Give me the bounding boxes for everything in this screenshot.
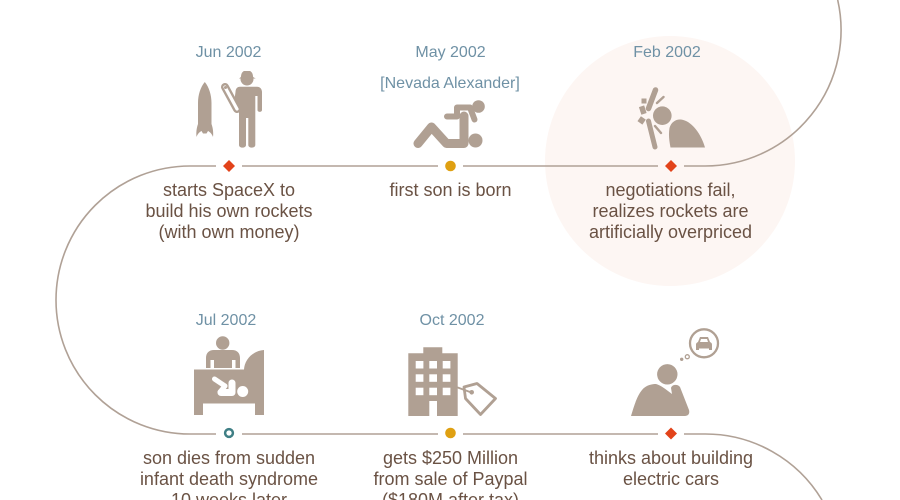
milestone: May 2002: first son is born	[389, 180, 512, 200]
icon: parent at crib	[194, 336, 264, 415]
icon: head hitting wall	[637, 90, 705, 148]
icon: thinker with car thought bubble	[631, 329, 718, 416]
diamond marker	[223, 160, 235, 172]
milestone: Jul 2002	[140, 312, 318, 500]
milestone: Feb 2002: negotiations fail,	[605, 180, 736, 200]
milestone: Oct 2002: gets $250 Million	[383, 448, 518, 468]
milestone: May 2002: May 2002	[415, 44, 486, 61]
circle marker	[445, 161, 456, 171]
diamond marker	[665, 428, 677, 440]
milestone: Jul 2002: son dies from sudden	[143, 448, 315, 468]
highlight circle	[545, 36, 795, 286]
circle marker	[445, 428, 456, 438]
milestone: Jun 2002: starts SpaceX to	[163, 180, 295, 200]
milestone: Jun 2002: Jun 2002	[196, 44, 262, 61]
diamond marker	[665, 160, 677, 172]
milestone: May 2002: [Nevada Alexander]	[380, 75, 520, 92]
milestone: Jul 2002: infant death syndrome	[140, 469, 318, 489]
ring marker	[225, 429, 233, 437]
milestone: electric cars	[589, 329, 753, 489]
milestone: Oct 2002: Oct 2002	[420, 312, 485, 329]
milestone: Oct 2002	[373, 312, 528, 500]
icon: couple	[418, 100, 485, 148]
milestone: electric cars: electric cars	[623, 469, 719, 489]
icon: building with price tag	[408, 347, 496, 416]
milestone: electric cars: thinks about building	[589, 448, 753, 468]
milestone: Jun 2002: build his own rockets	[145, 201, 313, 221]
icon: engineer with blueprint	[224, 71, 262, 148]
milestone: Oct 2002: from sale of Paypal	[373, 469, 528, 489]
milestone: Feb 2002: realizes rockets are	[592, 201, 749, 221]
icon: rocket	[196, 82, 213, 137]
milestone: Jun 2002: (with own money)	[158, 222, 300, 242]
milestone: Feb 2002	[589, 44, 752, 242]
milestone: Feb 2002: Feb 2002	[633, 44, 701, 61]
milestone: Feb 2002: artificially overpriced	[589, 222, 752, 242]
milestone: Jun 2002	[145, 44, 313, 242]
milestone: May 2002	[380, 44, 520, 200]
milestone: Jul 2002: Jul 2002	[196, 312, 256, 329]
